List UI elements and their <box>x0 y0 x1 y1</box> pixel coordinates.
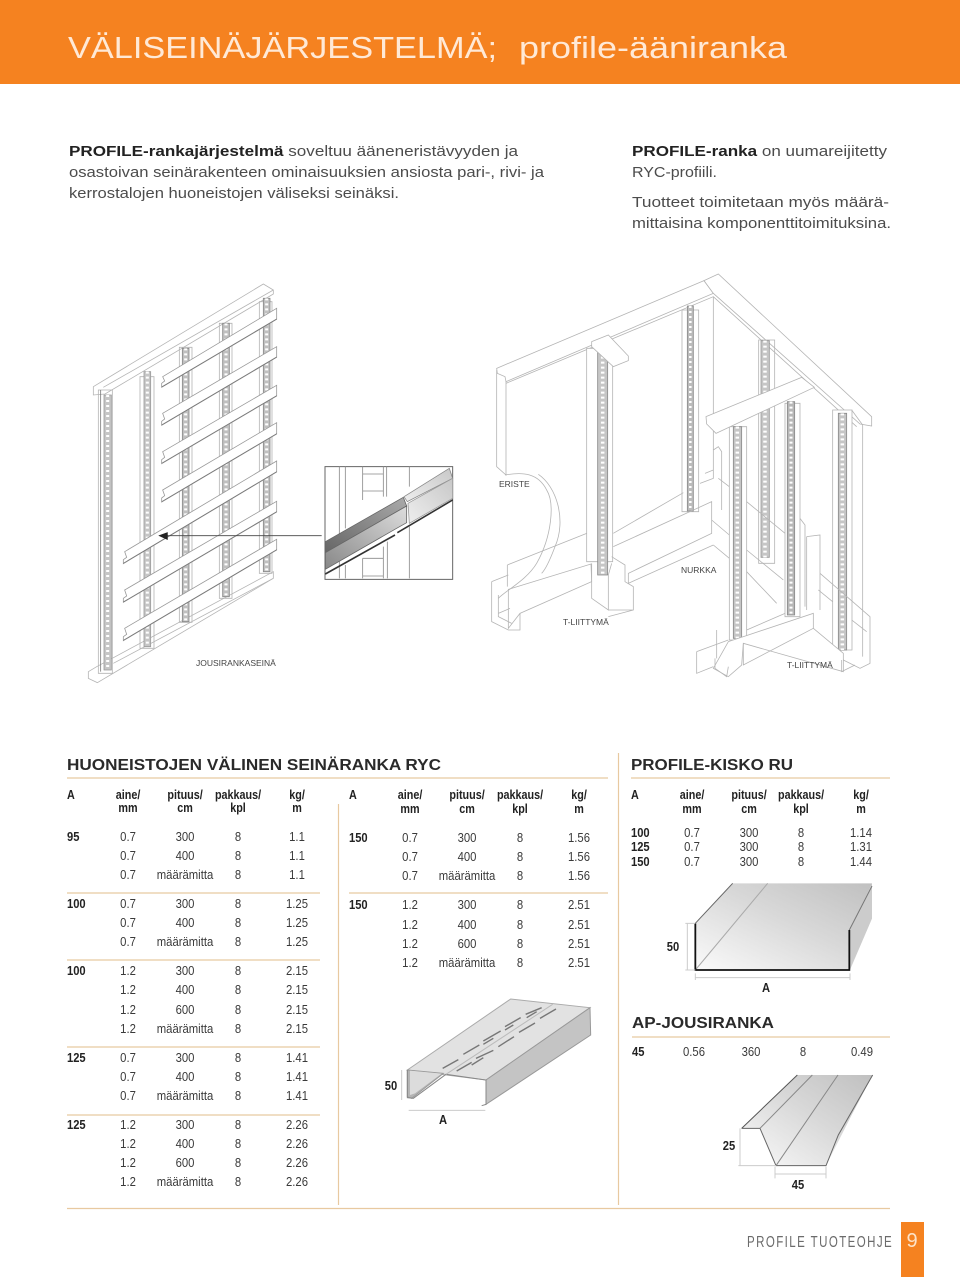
table 1: 300 <box>176 1117 195 1132</box>
inset detail <box>325 467 453 579</box>
table 1: 1.1 <box>289 829 305 844</box>
table 1: 1.2 <box>120 1002 136 1017</box>
table 2: 2.51 <box>568 936 590 951</box>
table 4: 0.56 <box>683 1044 705 1059</box>
table 3: 150 <box>631 854 650 869</box>
table 1: 0.7 <box>120 1069 136 1084</box>
table 1: 2.15 <box>286 963 308 978</box>
table 3: 0.7 <box>684 839 700 854</box>
table 3: 300 <box>740 825 759 840</box>
table 3: aine/ <box>680 787 705 802</box>
table 3: 300 <box>740 854 759 869</box>
intro text left: PROFILE-rankajärjestelmä soveltuu ääneneristävyyden ja <box>69 143 519 160</box>
table 1: 100 <box>67 963 86 978</box>
table 1: 2.15 <box>286 1002 308 1017</box>
table 2: m <box>574 801 584 816</box>
profile illustration: ap-jousiranka <box>738 1075 873 1178</box>
footer label: PROFILE TUOTEOHJE <box>747 1232 892 1250</box>
table 1: 8 <box>235 915 241 930</box>
table 1: 1.1 <box>289 867 305 882</box>
bottom tracks <box>492 410 870 677</box>
table 1: 8 <box>235 1088 241 1103</box>
table 3: 300 <box>740 839 759 854</box>
dimension: A: A <box>762 980 770 995</box>
table 1: 2.15 <box>286 1021 308 1036</box>
table 3: 8 <box>798 825 804 840</box>
table 2: aine/ <box>398 787 423 802</box>
table 1: 1.25 <box>286 915 308 930</box>
table 1: 1.41 <box>286 1088 308 1103</box>
table 2: 1.2 <box>402 897 418 912</box>
table 1: 8 <box>235 1117 241 1132</box>
intro text right: RYC-profiili. <box>632 164 717 181</box>
intro text left: kerrostalojen huoneistojen väliseksi seinäksi. <box>69 185 399 202</box>
table 1: 1.25 <box>286 896 308 911</box>
table 2: pituus/ <box>449 787 485 802</box>
table 1: 600 <box>176 1155 195 1170</box>
intro text right: Tuotteet toimitetaan myös määrä- <box>632 194 889 211</box>
table 1: 95 <box>67 829 80 844</box>
table 3: 125 <box>631 839 650 854</box>
caption: t-liittymä right: T-LIITTYMÄ <box>787 660 833 670</box>
table 1: kg/ <box>289 787 305 802</box>
table 2: kpl <box>512 801 528 816</box>
table 1: 0.7 <box>120 934 136 949</box>
dimension: 50: 50 <box>667 939 679 954</box>
table 3: 0.7 <box>684 825 700 840</box>
table 1: 1.2 <box>120 1136 136 1151</box>
table 1: määrämitta <box>157 867 213 882</box>
table 3: 8 <box>798 854 804 869</box>
heading: profile-kisko: PROFILE-KISKO RU <box>631 757 793 774</box>
table 1: 8 <box>235 963 241 978</box>
table 2: cm <box>459 801 475 816</box>
table 1: pituus/ <box>167 787 203 802</box>
table 2: 8 <box>517 936 523 951</box>
table 2: 1.56 <box>568 830 590 845</box>
table 2: pakkaus/ <box>497 787 544 802</box>
table 1: mm <box>118 800 138 815</box>
table 2: 1.2 <box>402 917 418 932</box>
table 1: 300 <box>176 1050 195 1065</box>
caption: jousirankaseinä: JOUSIRANKASEINÄ <box>196 658 276 668</box>
table 2: 400 <box>458 917 477 932</box>
table 3: 1.44 <box>850 854 872 869</box>
heading: ap-jousiranka: AP-JOUSIRANKA <box>632 1015 774 1032</box>
table 3: 1.14 <box>850 825 872 840</box>
table 1: 1.2 <box>120 1155 136 1170</box>
table 1: 2.26 <box>286 1174 308 1189</box>
table 2: 1.2 <box>402 936 418 951</box>
table 1: 8 <box>235 896 241 911</box>
page number block: 9 <box>906 1230 918 1252</box>
title: VÄLISEINÄJÄRJESTELMÄ; <box>68 30 497 65</box>
table 1: kpl <box>230 800 246 815</box>
title subtitle part: profile-ääniranka <box>519 30 788 65</box>
table 1: määrämitta <box>157 1021 213 1036</box>
table 1: 8 <box>235 982 241 997</box>
table 1: määrämitta <box>157 1088 213 1103</box>
table 1: 2.26 <box>286 1117 308 1132</box>
table 2: 0.7 <box>402 868 418 883</box>
table 4: 360 <box>742 1044 761 1059</box>
table 1: 1.2 <box>120 963 136 978</box>
table 1: 8 <box>235 848 241 863</box>
table 3: 100 <box>631 825 650 840</box>
table 1: 0.7 <box>120 867 136 882</box>
table 1: 8 <box>235 829 241 844</box>
table 2: määrämitta <box>439 955 495 970</box>
table 1: 8 <box>235 1021 241 1036</box>
table 1: 1.25 <box>286 934 308 949</box>
page number block <box>901 1222 924 1277</box>
table 4 <box>632 1044 873 1059</box>
table 2: kg/ <box>571 787 587 802</box>
table 2: 8 <box>517 830 523 845</box>
table 1: 1.2 <box>120 982 136 997</box>
caption: nurkka: NURKKA <box>681 565 717 575</box>
drawing: jousirankaseinä wall <box>88 284 453 683</box>
table 3: A <box>631 787 639 802</box>
table 2: 1.2 <box>402 955 418 970</box>
table 1: m <box>292 800 302 815</box>
table 3: pituus/ <box>731 787 767 802</box>
studs <box>98 298 272 673</box>
table 3: 1.31 <box>850 839 872 854</box>
intro text right: mittaisina komponenttitoimituksina. <box>632 215 891 232</box>
table 1: cm <box>177 800 193 815</box>
table 1: 125 <box>67 1050 86 1065</box>
table 3 <box>631 787 872 869</box>
table 2: A <box>349 787 357 802</box>
table 2: 2.51 <box>568 955 590 970</box>
table 1: 400 <box>176 915 195 930</box>
heading: huoneistojen välinen seinäranka: HUONEISTOJEN VÄLINEN SEINÄRANKA RYC <box>67 757 441 774</box>
table 1: 300 <box>176 896 195 911</box>
table 1: 8 <box>235 1069 241 1084</box>
table 4: 0.49 <box>851 1044 873 1059</box>
table 3: mm <box>682 801 702 816</box>
table 2: 8 <box>517 917 523 932</box>
table 2: 150 <box>349 830 368 845</box>
table 1: 8 <box>235 1136 241 1151</box>
intro text right <box>632 143 891 232</box>
studs <box>587 306 852 650</box>
table 2: 400 <box>458 849 477 864</box>
table 1: 1.2 <box>120 1174 136 1189</box>
table 2: 2.51 <box>568 917 590 932</box>
table 1: 400 <box>176 1136 195 1151</box>
table 2: 300 <box>458 830 477 845</box>
table 1: 1.41 <box>286 1050 308 1065</box>
table 3: kg/ <box>853 787 869 802</box>
table 1: 300 <box>176 963 195 978</box>
table 2: 1.56 <box>568 868 590 883</box>
table 1: 8 <box>235 867 241 882</box>
table 1: pakkaus/ <box>215 787 262 802</box>
table 1: 2.26 <box>286 1155 308 1170</box>
table 1: 100 <box>67 896 86 911</box>
table 2: määrämitta <box>439 868 495 883</box>
table 1: 400 <box>176 848 195 863</box>
caption: eriste: ERISTE <box>499 479 530 489</box>
dimension: 45: 45 <box>792 1177 804 1192</box>
table 3: kpl <box>793 801 809 816</box>
table 3: 8 <box>798 839 804 854</box>
table 3: cm <box>741 801 757 816</box>
table 2: 0.7 <box>402 830 418 845</box>
drawing: wall corner <box>492 274 872 677</box>
profile illustration: profile-kisko <box>685 883 872 980</box>
table 1: määrämitta <box>157 934 213 949</box>
arrow <box>159 533 322 539</box>
table 1: 8 <box>235 1050 241 1065</box>
table 2: 0.7 <box>402 849 418 864</box>
table 2: 600 <box>458 936 477 951</box>
table 3: m <box>856 801 866 816</box>
table 1: 8 <box>235 934 241 949</box>
table 1: 8 <box>235 1174 241 1189</box>
table 1: 2.15 <box>286 982 308 997</box>
table 2: 8 <box>517 868 523 883</box>
dimension: A: A <box>439 1112 447 1127</box>
table 1: 1.41 <box>286 1069 308 1084</box>
table 1: 125 <box>67 1117 86 1132</box>
dimension: 25: 25 <box>723 1138 735 1153</box>
table 3: 0.7 <box>684 854 700 869</box>
table 2: 300 <box>458 897 477 912</box>
table 2: mm <box>400 801 420 816</box>
intro text right: PROFILE-ranka on uumareijitetty <box>632 143 888 160</box>
table 1: A <box>67 787 75 802</box>
header band <box>0 0 960 84</box>
cross tracks <box>592 335 814 433</box>
intro text left <box>69 143 545 202</box>
table 2: 1.56 <box>568 849 590 864</box>
table 1: 0.7 <box>120 829 136 844</box>
table 2: 150 <box>349 897 368 912</box>
table 1: 1.2 <box>120 1117 136 1132</box>
table 1: 300 <box>176 829 195 844</box>
divider lines <box>67 753 890 1208</box>
table 1: 8 <box>235 1002 241 1017</box>
table 1: 400 <box>176 982 195 997</box>
table 2: 8 <box>517 897 523 912</box>
table 1: 8 <box>235 1155 241 1170</box>
table 1: määrämitta <box>157 1174 213 1189</box>
table 4: 8 <box>800 1044 806 1059</box>
table 2 <box>349 787 590 970</box>
table 1 <box>67 787 308 1189</box>
intro text left: osastoivan seinärakenteen ominaisuuksien ansiosta pari-, rivi- ja <box>69 164 545 181</box>
profile illustration: perforated rail <box>402 999 591 1110</box>
dimension: 50: 50 <box>385 1078 397 1093</box>
table 3: pakkaus/ <box>778 787 825 802</box>
table 1: 0.7 <box>120 1088 136 1103</box>
table 1: 2.26 <box>286 1136 308 1151</box>
horizontal rails <box>123 308 277 641</box>
table 1: 0.7 <box>120 915 136 930</box>
table 4: 45 <box>632 1044 645 1059</box>
table 1: aine/ <box>116 787 141 802</box>
table 1: 1.1 <box>289 848 305 863</box>
table 1: 1.2 <box>120 1021 136 1036</box>
table 2: 2.51 <box>568 897 590 912</box>
table 1: 600 <box>176 1002 195 1017</box>
table 1: 0.7 <box>120 896 136 911</box>
table 2: 8 <box>517 955 523 970</box>
caption: t-liittymä left: T-LIITTYMÄ <box>563 617 609 627</box>
table 1: 0.7 <box>120 1050 136 1065</box>
insulation curve <box>498 474 560 598</box>
table 1: 400 <box>176 1069 195 1084</box>
table 2: 8 <box>517 849 523 864</box>
table 1: 0.7 <box>120 848 136 863</box>
